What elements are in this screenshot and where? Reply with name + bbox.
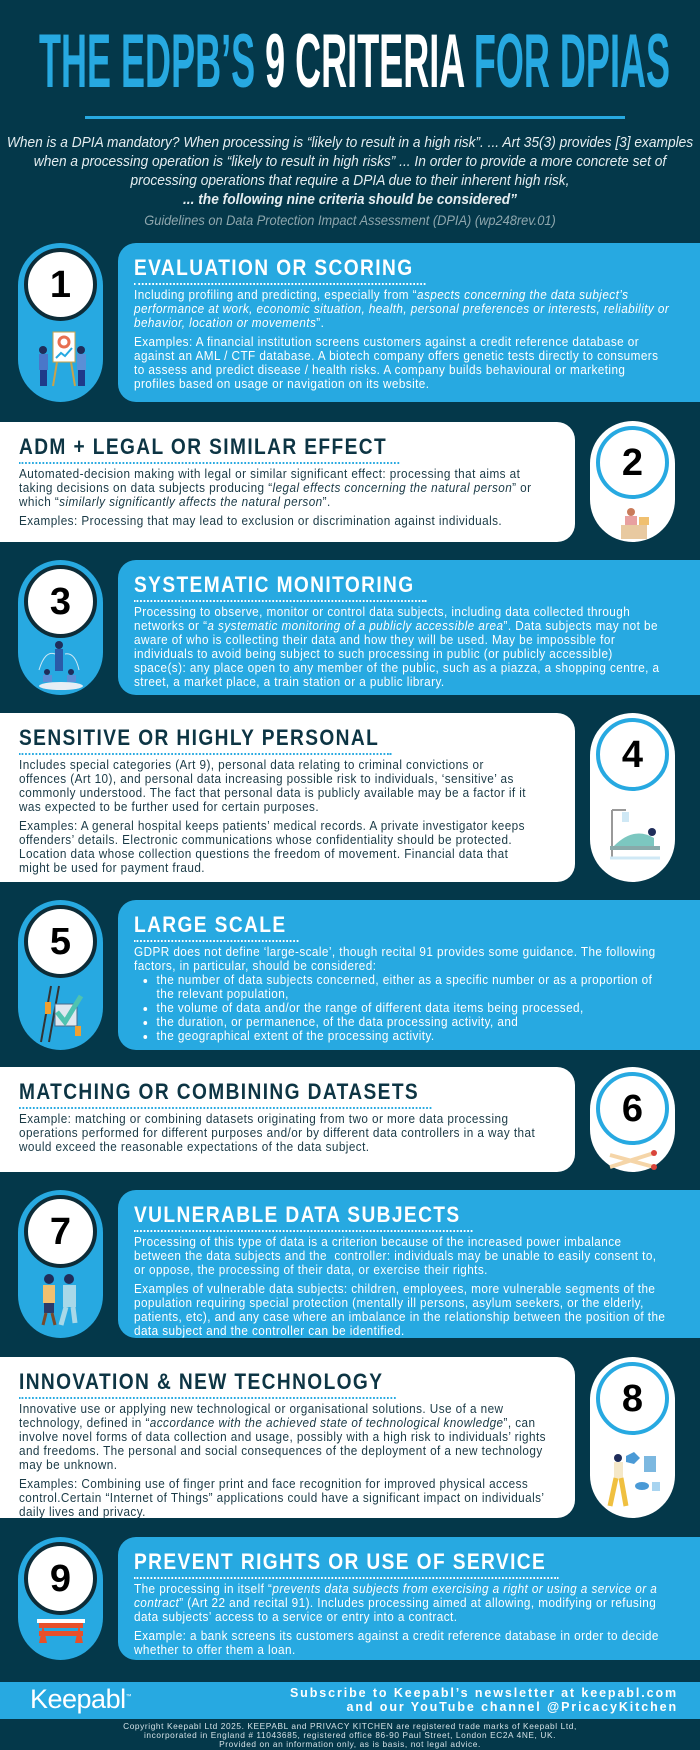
panel 9: prevent rights: whether to offer them a loan.: [134, 1643, 296, 1657]
panel 6: matching datasets: MATCHING OR COMBINING DATASETS: [19, 1079, 419, 1104]
panel 9: prevent rights: PREVENT RIGHTS OR USE OF SERVICE: [134, 1549, 546, 1574]
panel 7: vulnerable data subjects: population requiring special protection (mentally ill persons, asylum seekers, or the elderly,: [134, 1296, 644, 1310]
intro quote: ... the following nine criteria should be considered”: [183, 191, 517, 208]
panel 7: vulnerable data subjects: data subject and the controller can be identified.: [134, 1324, 405, 1338]
subscribe text: [290, 1686, 678, 1714]
panel 5: large scale: LARGE SCALE: [134, 912, 286, 937]
pill 6: 6: [622, 1088, 643, 1130]
panel 7: vulnerable data subjects: between the data subjects and the controller: individuals may be unable to easily consent to,: [134, 1249, 656, 1263]
pill 8: 8: [622, 1378, 643, 1420]
panel 8: innovation: [0, 1357, 575, 1518]
panel 3: systematic monitoring: space(s): any place open to any member of the public, such as a piazza, a shopping centre, a: [134, 661, 660, 675]
panel 2: ADM: ADM + LEGAL OR SIMILAR EFFECT: [19, 434, 387, 459]
pill 2: [590, 421, 675, 542]
panel 5: large scale: [118, 900, 700, 1050]
intro quote: when a processing operation is “likely to result in high risks” ... In order to provide a more concrete set of: [34, 153, 666, 170]
panel 1: evaluation or scoring: profiles based on usage or navigation on its website.: [134, 377, 429, 391]
panel 1: evaluation or scoring: Including profiling and predicting, especially from “aspects concerning the data subject’s: [134, 288, 628, 302]
panel 5: large scale: factors, in particular, should be considered:: [134, 959, 376, 973]
icon: presentation: [39, 332, 86, 386]
panel 1: evaluation or scoring: Examples: A financial institution screens customers against a credit reference database or: [134, 335, 639, 349]
logo: Keepabl: Keepabl™: [30, 1684, 131, 1714]
pill 8: [590, 1357, 675, 1518]
panel 3: systematic monitoring: Processing to observe, monitor or control data subjects, including data collected through: [134, 605, 630, 619]
panel 8: innovation: technology, defined in “accordance with the achieved state of technological knowledge”, can: [19, 1416, 535, 1430]
pill 3: 3: [50, 581, 71, 623]
panel 8: innovation: and freedoms. The personal and social consequences of the deployment of a new technology: [19, 1444, 543, 1458]
panel 4: sensitive: [0, 713, 575, 882]
icon: crossed matches: [609, 1150, 657, 1170]
panel 1: evaluation or scoring: against an AML / CTF database. A biotech company offers genetic tests directly to consumers: [134, 349, 658, 363]
panel 5: large scale: the duration, or permanence, of the data processing activity, and: [157, 1015, 518, 1029]
copyright: [123, 1721, 577, 1749]
panel 3: systematic monitoring: SYSTEMATIC MONITORING: [134, 572, 415, 597]
intro quote: [7, 134, 693, 208]
panel 2: ADM: [0, 422, 575, 542]
panel 1: evaluation or scoring: EVALUATION OR SCORING: [134, 255, 413, 280]
panel 8: innovation: involve novel forms of data collection and usage, possibly with a high risk to individuals’ rights: [19, 1430, 546, 1444]
pill 7: 7: [50, 1211, 71, 1253]
panel 6: matching datasets: [0, 1067, 575, 1172]
panel 1: evaluation or scoring: [118, 243, 700, 402]
pill 2: 2: [622, 442, 643, 484]
pill 4: 4: [622, 734, 643, 776]
panel 2: ADM: Automated-decision making with legal or similar significant effect: processing that aims at: [19, 467, 520, 481]
panel 9: prevent rights: [118, 1537, 700, 1660]
panel 4: sensitive: was expected to be further used for certain purposes.: [19, 800, 319, 814]
panel 4: sensitive: Includes special categories (Art 9), personal data relating to criminal convictions or: [19, 758, 484, 772]
icon: monitoring team: [38, 641, 83, 690]
panel 6: matching datasets: Example: matching or combining datasets originating from two or more data processing: [19, 1112, 508, 1126]
pill 3: [18, 560, 103, 695]
pill 9: [18, 1537, 103, 1660]
panel 5: large scale: the geographical extent of the processing activity.: [157, 1029, 435, 1043]
pill 9: 9: [50, 1558, 71, 1600]
copyright: Provided on an information only, as is basis, not legal advice.: [219, 1739, 481, 1749]
panel 4: sensitive: offenders’ details. Electronic communications whose confidentiality should be protected.: [19, 833, 512, 847]
panel 7: vulnerable data subjects: [118, 1190, 700, 1338]
pill 7: [18, 1190, 103, 1338]
panel 9: prevent rights: contract” (Art 22 and recital 91). Includes processing aimed at allowing, modifying or refusing: [134, 1596, 656, 1610]
panel 1: evaluation or scoring: behavior, location or movements”.: [134, 316, 324, 330]
panel 7: vulnerable data subjects: patients, etc), and any case where an imbalance in the relationship between the position of the: [134, 1310, 665, 1324]
panel 3: systematic monitoring: street, a market place, a train station or a public library.: [134, 675, 445, 689]
panel 8: innovation: may be unknown.: [19, 1458, 117, 1472]
intro quote: When is a DPIA mandatory? When processing is “likely to result in a high risk”. ... Art 35(3) provides [3] examples: [7, 134, 693, 151]
copyright: Copyright Keepabl Ltd 2025. KEEPABL and PRIVACY KITCHEN are registered trade marks of Keepabl Ltd,: [123, 1721, 577, 1731]
subscribe text: and our YouTube channel @PricacyKitchen: [347, 1700, 678, 1714]
icon: hospital bed: [610, 809, 660, 860]
panel 2: ADM: taking decisions on data subjects producing “legal effects concerning the natural person” or: [19, 481, 531, 495]
footer band: [0, 1682, 700, 1719]
citation: Guidelines on Data Protection Impact Assessment (DPIA) (wp248rev.01): [144, 212, 556, 228]
pill 1: [18, 243, 103, 402]
panel 5: large scale: the volume of data and/or the range of different data items being processed,: [157, 1001, 584, 1015]
icon: ladder and checkmark: [40, 986, 83, 1042]
panel 6: matching datasets: operations performed for different purposes and/or by different data controllers in a way that: [19, 1126, 535, 1140]
panel 1: evaluation or scoring: to assess and predict disease / health risks. A company builds behavioural or marketing: [134, 363, 625, 377]
panel 4: sensitive: Examples: A general hospital keeps patients’ medical records. A private investigator keeps: [19, 819, 525, 833]
panel 3: systematic monitoring: individuals to avoid being subject to such processing in public (or publicly accessible): [134, 647, 613, 661]
pill 6: [590, 1067, 675, 1172]
intro quote: processing operations that require a DPIA due to their inherent high risk,: [131, 172, 569, 189]
panel 7: vulnerable data subjects: Examples of vulnerable data subjects: children, employees, more vulnerable segments of the: [134, 1282, 655, 1296]
panel 3: systematic monitoring: aware of who is collecting their data and how they will be used. May be impossible for: [134, 633, 615, 647]
icon: road barrier: [37, 1619, 85, 1643]
pill 5: 5: [50, 921, 71, 963]
panel 4: sensitive: might be used for payment fraud.: [19, 861, 205, 875]
panel 8: innovation: Examples: Combining use of finger print and face recognition for improved physical access: [19, 1477, 528, 1491]
copyright: incorporated in England # 11043685, registered office 86-90 Paul Street, London EC2A 4NE, UK.: [144, 1730, 556, 1740]
panel 6: matching datasets: would exceed the reasonable expectations of the data subject.: [19, 1140, 369, 1154]
panel 4: sensitive: commonly understood. The fact that personal data is publicly available may be a factor if it: [19, 786, 526, 800]
icon: person at desk: [621, 508, 649, 539]
panel 4: sensitive: Location data whose collection questions the freedom of movement. Financial data that: [19, 847, 508, 861]
panel 3: systematic monitoring: [118, 560, 700, 695]
panel 8: innovation: INNOVATION & NEW TECHNOLOGY: [19, 1369, 383, 1394]
panel 7: vulnerable data subjects: or oppose, the processing of their data, or exercise their rights.: [134, 1263, 488, 1277]
panel 9: prevent rights: The processing in itself “prevents data subjects from exercising a right or using a service or a: [134, 1582, 657, 1596]
panel 9: prevent rights: data subjects’ access to a service or entry into a contract.: [134, 1610, 457, 1624]
panel 4: sensitive: SENSITIVE OR HIGHLY PERSONAL: [19, 725, 379, 750]
panel 2: ADM: which “similarly significantly affects the natural person”.: [19, 495, 331, 509]
pill 5: [18, 900, 103, 1050]
panel 1: evaluation or scoring: performance at work, economic situation, health, personal preferences or interests, reliability or: [134, 302, 669, 316]
panel 9: prevent rights: Example: a bank screens its customers against a credit reference database in order to decide: [134, 1629, 659, 1643]
panel 5: large scale: the relevant population,: [157, 987, 289, 1001]
panel 8: innovation: Innovative use or applying new technological or organisational solutions. Use of a new: [19, 1402, 503, 1416]
panel 8: innovation: control.Certain “Internet of Things” applications could have a significant impact on individuals’: [19, 1491, 544, 1505]
panel 7: vulnerable data subjects: Processing of this type of data is a criterion because of the increased power imbalance: [134, 1235, 621, 1249]
icon: tech person: [608, 1452, 660, 1506]
pill 1: 1: [50, 264, 71, 306]
panel 5: large scale: GDPR does not define ‘large-scale’, though recital 91 provides some guidance. The following: [134, 945, 656, 959]
panel 4: sensitive: offences (Art 10), and personal data increasing possible risk to individuals, ‘sensitive’ as: [19, 772, 514, 786]
icon: children: [42, 1274, 78, 1326]
panel 5: large scale: the number of data subjects concerned, either as a specific number or as a proportion of: [157, 973, 652, 987]
panel 7: vulnerable data subjects: VULNERABLE DATA SUBJECTS: [134, 1202, 461, 1227]
pill 4: [590, 713, 675, 882]
panel 3: systematic monitoring: networks or “a systematic monitoring of a publicly accessible area”. Data subjects may not be: [134, 619, 658, 633]
subscribe text: Subscribe to Keepabl’s newsletter at keepabl.com: [290, 1686, 678, 1700]
panel 2: ADM: Examples: Processing that may lead to exclusion or discrimination against individuals.: [19, 514, 502, 528]
